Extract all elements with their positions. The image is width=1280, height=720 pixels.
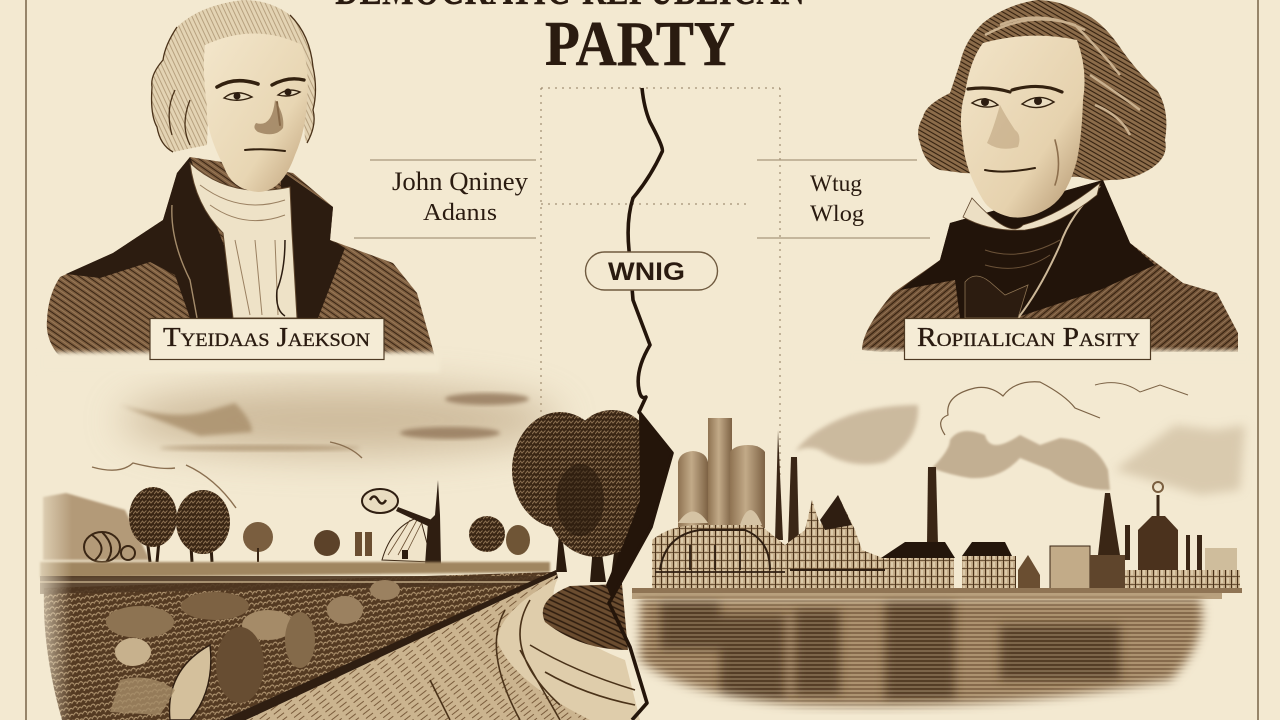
right landscape: industrial city — [620, 382, 1245, 715]
river reflection — [620, 595, 1240, 715]
dirt road — [246, 574, 640, 720]
smoke clouds — [795, 382, 1245, 495]
annotation whig line 2: Wlog — [810, 201, 865, 226]
whig pill label — [586, 252, 718, 290]
dark wedge at tree — [606, 412, 672, 600]
crack line — [609, 88, 672, 720]
chimneys — [775, 430, 1202, 570]
soft fade at coat bottom — [40, 352, 440, 372]
dotted comparison grid — [541, 88, 780, 480]
distant hill — [43, 493, 150, 560]
annotation name line 1: John Qniney — [392, 167, 528, 196]
collar — [963, 183, 1100, 230]
gothic hall — [785, 495, 888, 590]
distant trees — [129, 487, 530, 562]
coat — [47, 157, 435, 357]
nose shadow — [987, 105, 1019, 149]
title — [335, 0, 805, 79]
title word party: PARTY — [545, 8, 735, 79]
annotation name line 2: Adanıs — [423, 200, 497, 226]
domed works with wheel — [1138, 482, 1237, 573]
cravat folds and bow tie — [965, 240, 1060, 318]
portrait left: Thomas Jefferson figure — [40, 0, 440, 372]
left landscape: farmland — [27, 370, 654, 720]
nose shadow — [254, 100, 283, 134]
barn and windmill — [362, 480, 441, 565]
portrait name plate left: Tyeidaas Jaekson — [163, 322, 370, 352]
coat lower — [862, 180, 1238, 352]
facial features — [217, 79, 304, 151]
lapel highlight — [1018, 186, 1100, 318]
neck and cravat — [190, 163, 297, 318]
whig pill label: WNIG — [608, 258, 685, 286]
portrait right: Republican figure — [850, 0, 1250, 364]
portrait name plate right: Ropiialican Pasity — [917, 322, 1140, 352]
large tree — [512, 410, 654, 585]
foreground crop leaves — [106, 580, 400, 720]
ornate hall — [652, 525, 785, 590]
crop field — [44, 572, 554, 720]
horizon strip — [40, 562, 550, 578]
portrait name plate left — [150, 318, 384, 360]
dark coat shoulders and lapels — [66, 157, 250, 318]
portrait name plate right — [904, 318, 1150, 360]
hay wheel — [84, 532, 135, 562]
sky wash and clouds — [92, 386, 560, 508]
hair — [918, 0, 1166, 181]
black roof houses — [881, 542, 1125, 590]
roadside grass — [543, 584, 628, 650]
cooling towers — [678, 418, 765, 530]
soft fade at coat bottom — [850, 350, 1250, 364]
face — [961, 36, 1085, 218]
hair — [152, 0, 316, 152]
dark road edge — [222, 570, 558, 720]
waterfront strip — [1125, 570, 1240, 590]
black coat and lapels — [900, 180, 1155, 318]
annotation left: John Quincy Adams — [354, 160, 536, 238]
left edge vignette — [27, 370, 72, 720]
annotation whig line 1: Wtug — [810, 171, 862, 196]
central dividing crack — [606, 88, 672, 720]
facial features — [968, 86, 1062, 185]
face — [204, 34, 308, 192]
hair highlights — [985, 18, 1140, 135]
annotation right: Whig — [757, 160, 930, 238]
